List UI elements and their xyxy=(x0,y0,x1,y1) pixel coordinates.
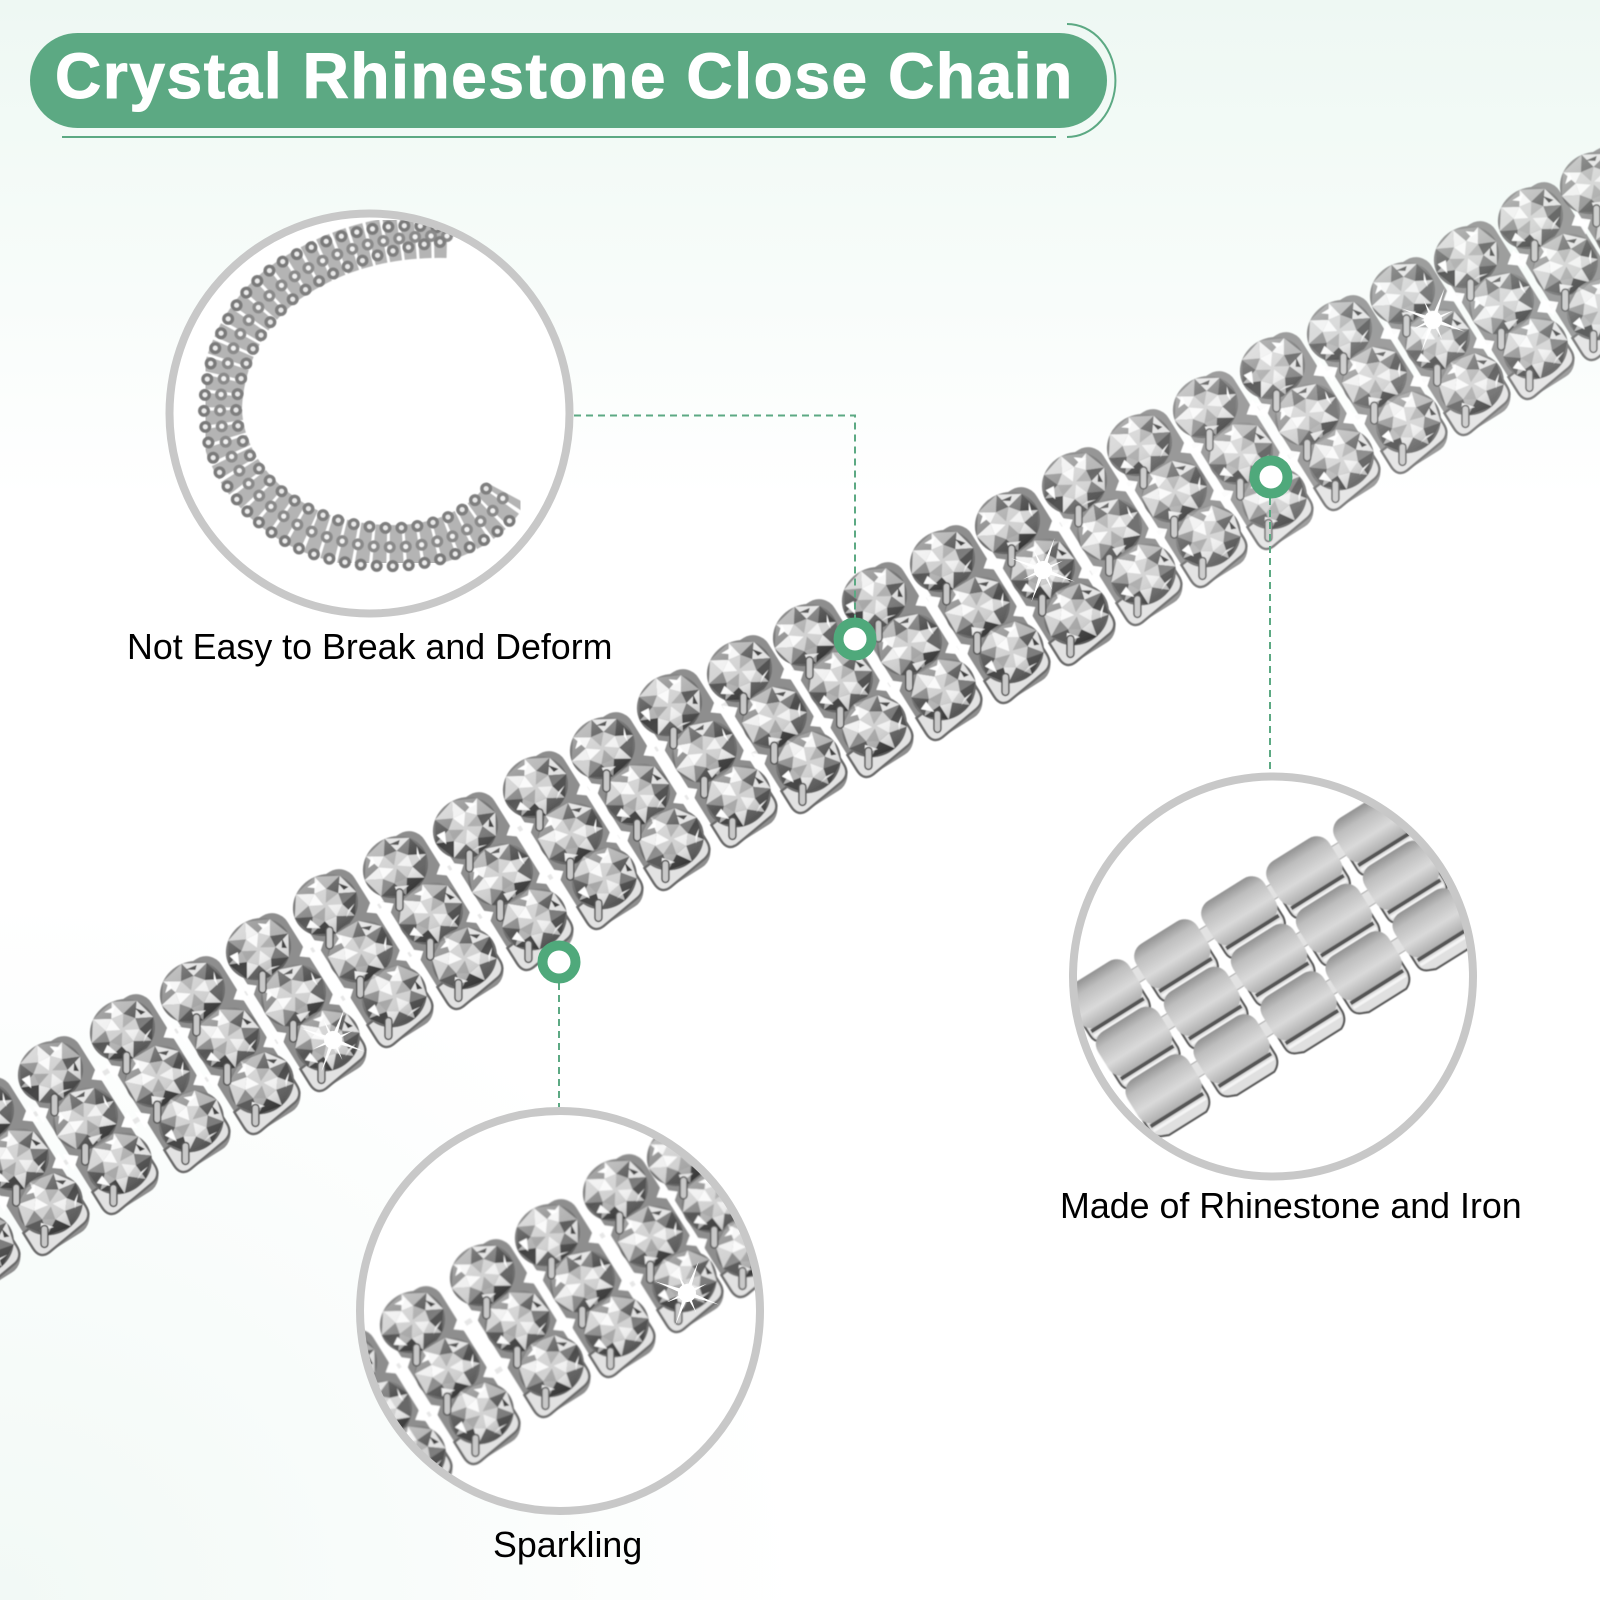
panel: curved chain circle xyxy=(170,214,570,614)
leader line: break panel xyxy=(574,416,855,620)
panel: sparkling close-up circle xyxy=(282,1091,806,1521)
marker: sparkling xyxy=(542,946,576,978)
title text: Crystal Rhinestone Close Chain xyxy=(55,40,1074,112)
main rhinestone chain xyxy=(0,119,1600,1306)
label: iron: Made of Rhinestone and Iron xyxy=(1060,1186,1522,1226)
title banner xyxy=(30,24,1115,138)
leader line: iron panel xyxy=(1269,498,1271,770)
label: break: Not Easy to Break and Deform xyxy=(127,627,612,667)
sparkle highlights xyxy=(289,276,1477,1084)
marker: iron xyxy=(1254,460,1288,494)
panel: iron back close-up circle xyxy=(1060,776,1494,1176)
marker: break xyxy=(838,622,872,656)
leader line: sparkling panel xyxy=(558,983,560,1107)
label: sparkling: Sparkling xyxy=(493,1525,642,1565)
